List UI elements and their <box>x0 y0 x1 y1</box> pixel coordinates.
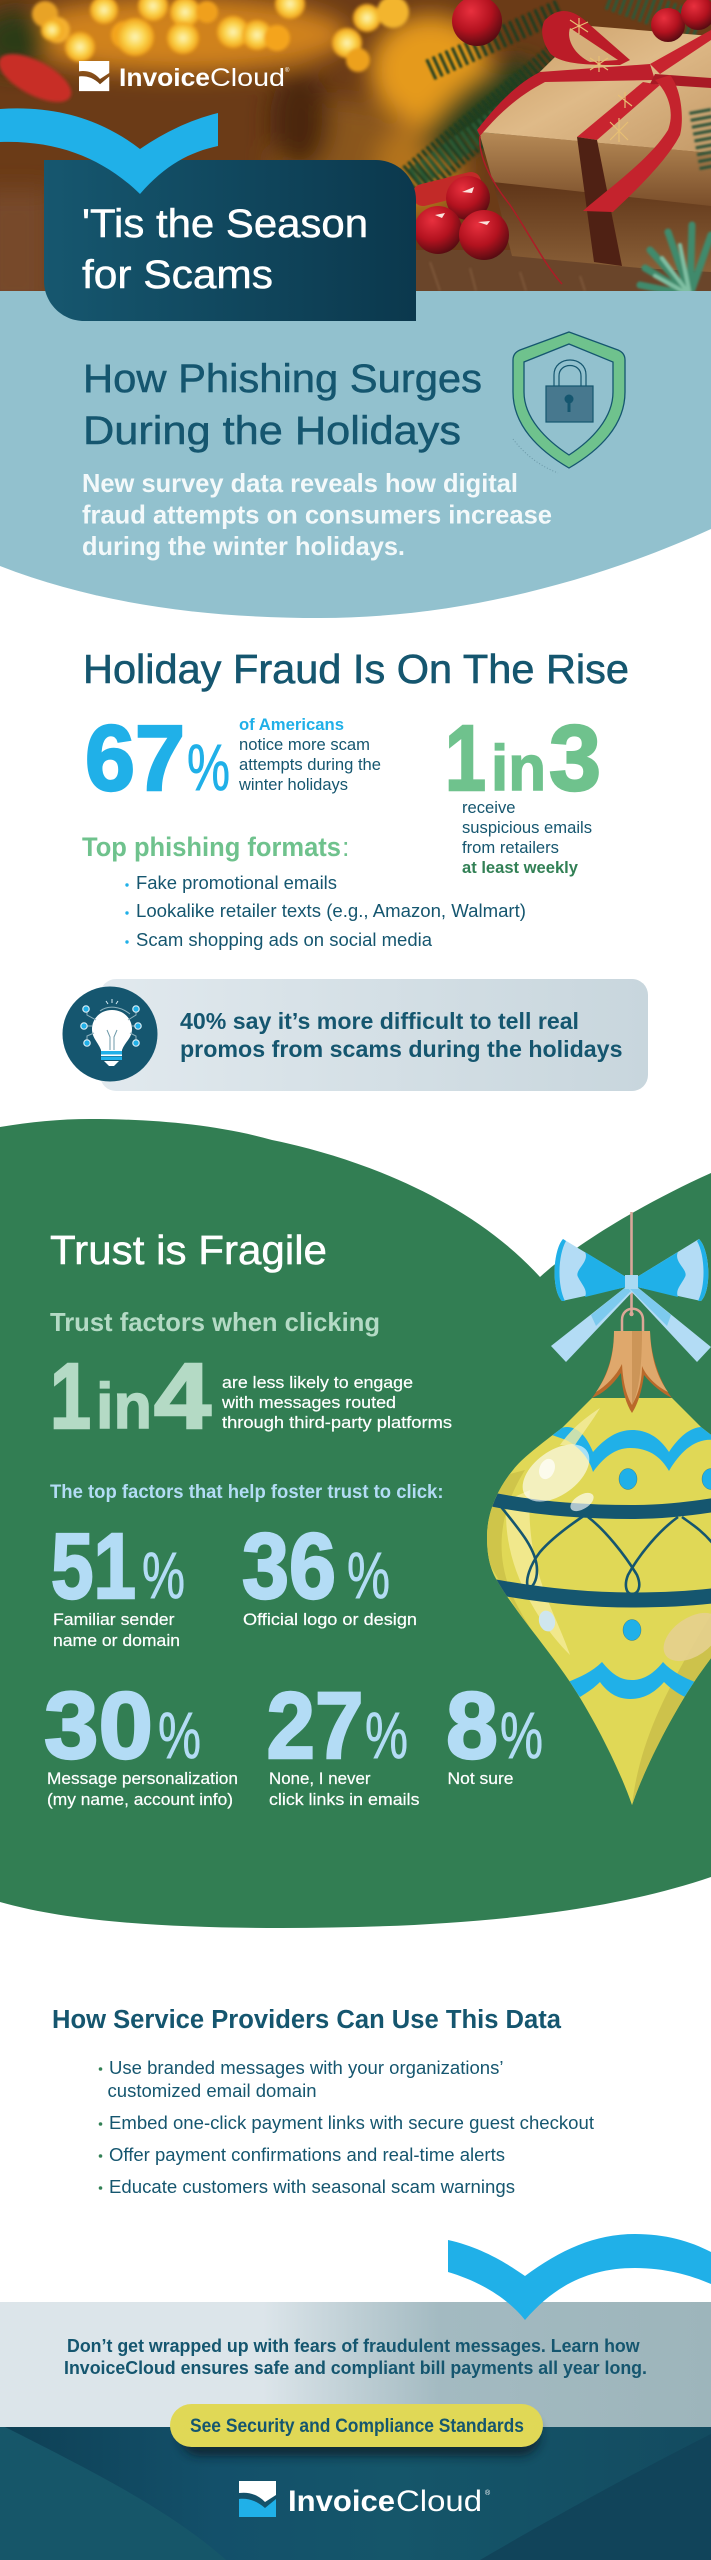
stat: 27 percent: % <box>365 1698 408 1772</box>
stat: 51 percent <box>51 1514 185 1650</box>
hero photo: holiday gift and lights <box>0 0 711 310</box>
logo: InvoiceCloud top <box>79 61 290 92</box>
stat: 8 percent <box>446 1673 543 1788</box>
stat text: less likely to engage: with messages routed <box>221 1394 396 1412</box>
stat: 51 percent: Familiar sender <box>53 1611 175 1629</box>
stat: 1 in 4: in <box>96 1370 152 1442</box>
logo: InvoiceCloud bottom: Cloud <box>396 2485 482 2518</box>
ornament jewels <box>619 1468 711 1640</box>
logo: InvoiceCloud top: ® <box>285 67 290 74</box>
stat: 1 in 4: 1 <box>50 1344 91 1448</box>
stat: 1 in 3: 3 <box>549 706 601 810</box>
stat text: receive suspicious emails: at least weekly <box>462 859 579 877</box>
stat: 27 percent: click links in emails <box>269 1791 420 1809</box>
stat text: receive suspicious emails: from retailers <box>462 839 559 857</box>
ornament body <box>480 1390 711 1810</box>
stat: 8 percent: Not sure <box>448 1770 514 1788</box>
stat text: less likely to engage <box>221 1374 452 1432</box>
list: provider recommendations: Educate customers with seasonal scam warnings <box>109 2177 515 2197</box>
stat: 67 percent: 67 <box>85 706 185 810</box>
panel: green trust section <box>0 1119 711 1928</box>
stat text: less likely to engage: through third-party platforms <box>222 1414 452 1432</box>
callout text: promos from scams during the holidays <box>180 1036 622 1062</box>
stat: 1 in 4: 4 <box>154 1344 211 1448</box>
callout text: 40% say it’s more difficult to tell real <box>180 1008 579 1034</box>
callout: 40 percent <box>62 979 648 1091</box>
button: see security standards: See Security and Compliance Standards <box>190 2415 524 2437</box>
icon: shield with padlock <box>513 332 625 473</box>
panel: light blue intro background <box>0 291 711 618</box>
list: phishing formats: Lookalike retailer texts (e.g., Amazon, Walmart) <box>136 901 526 921</box>
icon: light bulb <box>62 986 158 1082</box>
call to action text: InvoiceCloud ensures safe and compliant bill payments all year long. <box>64 2358 647 2378</box>
list: provider recommendations <box>99 2058 594 2197</box>
stat: 36 percent <box>242 1514 417 1629</box>
title text: for Scams <box>82 253 273 297</box>
ornament cap <box>592 1331 672 1413</box>
intro paragraph <box>82 468 552 561</box>
heading: Holiday Fraud: Holiday Fraud Is On The Rise <box>83 646 629 692</box>
list: phishing formats: Scam shopping ads on social media <box>136 930 433 950</box>
stat: 27 percent <box>266 1673 420 1809</box>
icon: yellow christmas ornament <box>480 1212 711 1810</box>
stat: 30 percent: (my name, account info) <box>47 1791 233 1809</box>
bow <box>551 1239 711 1362</box>
stat text: receive suspicious emails: receive <box>462 799 516 817</box>
stat: 51 percent: % <box>142 1538 185 1612</box>
ribbon on gift <box>477 11 711 266</box>
stat: 30 percent: Message personalization <box>47 1770 238 1788</box>
stat: 36 percent: Official logo or design <box>243 1611 417 1629</box>
logo: InvoiceCloud bottom: Invoice <box>288 2485 395 2518</box>
heading: Trust is Fragile: Trust is Fragile <box>50 1227 327 1273</box>
intro paragraph: fraud attempts on consumers increase <box>82 500 552 530</box>
logo: InvoiceCloud top: Invoice <box>119 64 210 92</box>
stat: 1 in 3: in <box>491 732 546 804</box>
ornament lattice <box>497 1502 711 1594</box>
stat text: of Americans: of Americans <box>239 716 344 734</box>
list: provider recommendations: Use branded messages with your organizations’ <box>109 2058 504 2078</box>
stat text: less likely to engage: are less likely to engage <box>222 1374 413 1392</box>
stat: 1 in 3 <box>445 706 601 877</box>
subtitle heading <box>83 357 482 453</box>
arrow: blue swoosh top <box>0 108 218 194</box>
stat: 36 percent: 36 <box>242 1514 336 1618</box>
stat: 30 percent: % <box>158 1698 201 1772</box>
stat: 67 percent: % <box>187 730 230 804</box>
callout text <box>180 1008 622 1062</box>
subheading: Trust factors: Trust factors when clicking <box>50 1307 380 1337</box>
stat: 1 in 4 <box>50 1344 452 1448</box>
call to action text: Don’t get wrapped up with fears of fraudulent messages. Learn how <box>67 2336 641 2356</box>
subheading: top phishing formats: : <box>342 832 350 862</box>
stat: 30 percent <box>44 1673 238 1809</box>
stat text: of Americans: winter holidays <box>238 776 348 794</box>
stat: 1 in 3: 1 <box>445 706 486 810</box>
subheading: top factors: The top factors that help foster trust to click: <box>50 1482 444 1503</box>
logo: InvoiceCloud bottom: ® <box>485 2489 491 2497</box>
subtitle heading: During the Holidays <box>83 409 461 453</box>
intro paragraph: during the winter holidays. <box>82 531 405 561</box>
stat text: of Americans: attempts during the <box>239 756 381 774</box>
green sprig <box>640 110 711 295</box>
stat: 8 percent: % <box>500 1698 543 1772</box>
ornament scallops <box>552 1427 711 1472</box>
stat: 30 percent: 30 <box>44 1673 153 1779</box>
logo: InvoiceCloud top: Cloud <box>210 64 285 92</box>
ornament highlights <box>560 1408 600 1445</box>
list: phishing formats: Fake promotional emails <box>136 873 337 893</box>
intro paragraph: New survey data reveals how digital <box>82 468 518 498</box>
stat text: of Americans <box>238 716 381 794</box>
wood table <box>400 250 711 291</box>
stat: 51 percent: 51 <box>51 1514 136 1618</box>
button: see security standards <box>170 2404 543 2456</box>
stat: 8 percent: 8 <box>446 1673 498 1779</box>
list: provider recommendations: Offer payment confirmations and real-time alerts <box>109 2145 505 2165</box>
arrow: blue swoosh bottom <box>448 2234 711 2320</box>
title text <box>82 202 368 297</box>
stat: 36 percent: % <box>347 1538 390 1612</box>
stat: 27 percent: 27 <box>266 1673 364 1779</box>
fir branches <box>410 0 700 185</box>
stat text: receive suspicious emails <box>462 799 592 877</box>
stat: 27 percent: None, I never <box>269 1770 371 1788</box>
call to action text <box>64 2336 647 2378</box>
subtitle heading: How Phishing Surges <box>83 357 482 401</box>
subheading: top phishing formats: Top phishing formats <box>82 832 341 862</box>
panel: grey call to action band <box>0 2302 711 2428</box>
title text: 'Tis the Season <box>82 202 368 246</box>
title box <box>44 160 416 321</box>
gift box <box>493 182 711 272</box>
ornament bands <box>480 1497 711 1512</box>
list: phishing formats <box>125 873 526 950</box>
stat text: receive suspicious emails: suspicious emails <box>462 819 592 837</box>
stat: 67 percent <box>85 706 381 810</box>
stat: 51 percent: name or domain <box>53 1632 180 1650</box>
berries <box>410 0 711 260</box>
stat text: of Americans: notice more scam <box>239 736 370 754</box>
heading: service providers: How Service Providers Can Use This Data <box>52 2006 562 2034</box>
list: provider recommendations: Embed one-click payment links with secure guest checkout <box>109 2113 594 2133</box>
logo: InvoiceCloud bottom <box>239 2481 491 2518</box>
list: provider recommendations: customized email domain <box>108 2081 316 2101</box>
panel: footer dark band <box>0 2427 711 2560</box>
